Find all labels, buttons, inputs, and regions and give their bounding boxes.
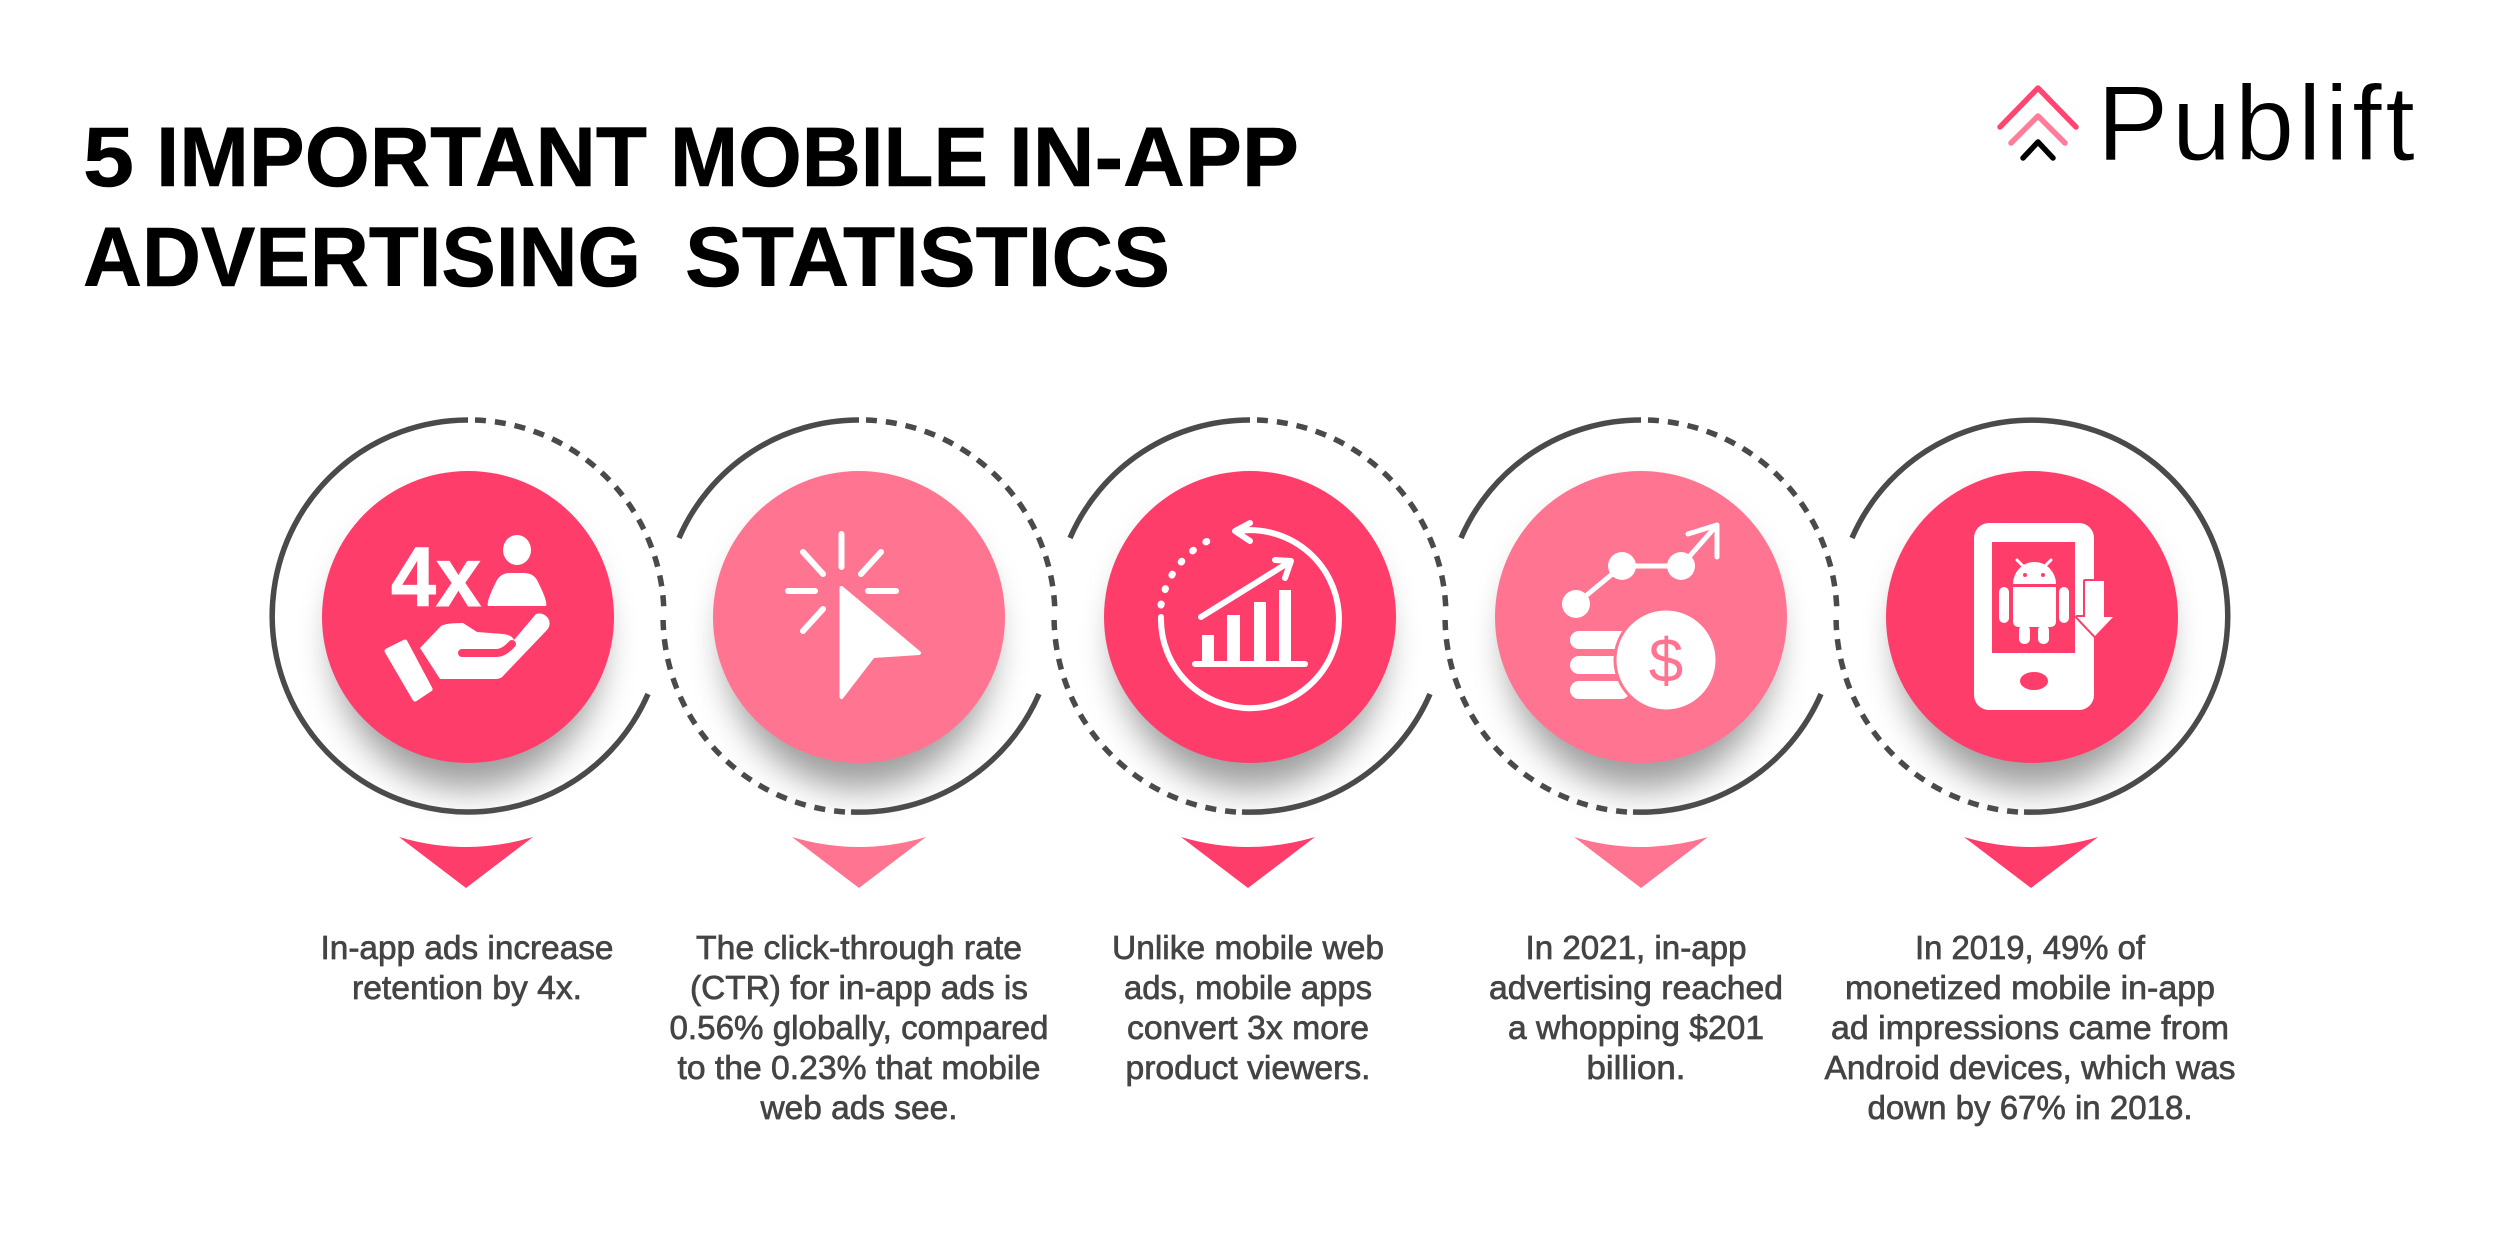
text block: In-app ads increase <box>320 929 614 966</box>
text block <box>1489 929 1783 1086</box>
icon: android phone with download arrow <box>1974 523 2113 710</box>
arrow pointer <box>399 837 533 888</box>
text block <box>1112 929 1384 1086</box>
panel: stat 3 <box>1054 420 1446 1086</box>
circle ring <box>663 420 1055 812</box>
text block: web ads see. <box>759 1089 958 1126</box>
circle ring <box>1836 420 2228 812</box>
text block: down by 67% in 2018. <box>1868 1089 2192 1126</box>
text block: a whopping $201 <box>1508 1009 1764 1046</box>
icon: logo chevrons <box>2000 88 2076 158</box>
circle shadow <box>1507 497 1775 789</box>
circle shadow <box>725 497 993 789</box>
text block: ad impressions came from <box>1831 1009 2229 1046</box>
arrow pointer <box>792 837 926 888</box>
text block <box>1824 929 2236 1126</box>
text block: monetized mobile in-app <box>1845 969 2215 1006</box>
panel: stat 1 <box>272 420 664 1006</box>
circle ring <box>1054 420 1446 812</box>
text block: Unlike mobile web <box>1112 929 1384 966</box>
text block: ads, mobile apps <box>1124 969 1372 1006</box>
title: MOBILE <box>670 110 988 204</box>
text block: Android devices, which was <box>1824 1049 2236 1086</box>
text block: product viewers. <box>1126 1049 1370 1086</box>
circle badge <box>322 471 614 763</box>
circle badge <box>1104 471 1396 763</box>
arrow pointer <box>1964 837 2098 888</box>
icon: 4x retention hand <box>387 530 550 699</box>
title: 5 <box>83 110 134 204</box>
title <box>83 110 1299 304</box>
panel: stat 2 <box>663 420 1055 1126</box>
text block: (CTR) for in-app ads is <box>690 969 1028 1006</box>
circle ring <box>272 420 664 812</box>
logo wordmark: Publift <box>2097 63 2415 183</box>
text block: advertising reached <box>1489 969 1783 1006</box>
circle shadow <box>334 497 602 789</box>
circle ring <box>1445 420 1837 812</box>
arrow pointer <box>1181 837 1315 888</box>
icon: growth chart in circular arrow <box>1161 523 1339 708</box>
circle shadow <box>1116 497 1384 789</box>
text block: 0.56% globally, compared <box>670 1009 1048 1046</box>
text block: convert 3x more <box>1127 1009 1369 1046</box>
circle shadow <box>1898 497 2166 789</box>
icon: revenue growth coins: $ <box>1649 627 1683 696</box>
logo: Publift <box>2000 63 2415 183</box>
text block: retention by 4x. <box>352 969 582 1006</box>
panel: stat 5 <box>1824 420 2236 1126</box>
text block: to the 0.23% that mobile <box>678 1049 1040 1086</box>
panel: stat 4 <box>1445 420 1837 1086</box>
text block <box>320 929 614 1006</box>
text block <box>670 929 1048 1126</box>
text block: The click-through rate <box>696 929 1022 966</box>
title: ADVERTISING <box>83 210 641 304</box>
icon: click cursor <box>788 534 919 697</box>
text block: billion. <box>1586 1049 1686 1086</box>
text block: In 2021, in-app <box>1526 929 1746 966</box>
title: IMPORTANT <box>156 110 647 204</box>
text block: In 2019, 49% of <box>1915 929 2146 966</box>
circle badge <box>1495 471 1787 763</box>
title: IN-APP <box>1009 110 1299 204</box>
title: STATISTICS <box>685 210 1170 304</box>
arrow pointer <box>1574 837 1708 888</box>
circle badge <box>1886 471 2178 763</box>
icon: 4x retention hand: 4x <box>391 530 481 624</box>
icon: revenue growth coins <box>1562 525 1717 711</box>
circle badge <box>713 471 1005 763</box>
